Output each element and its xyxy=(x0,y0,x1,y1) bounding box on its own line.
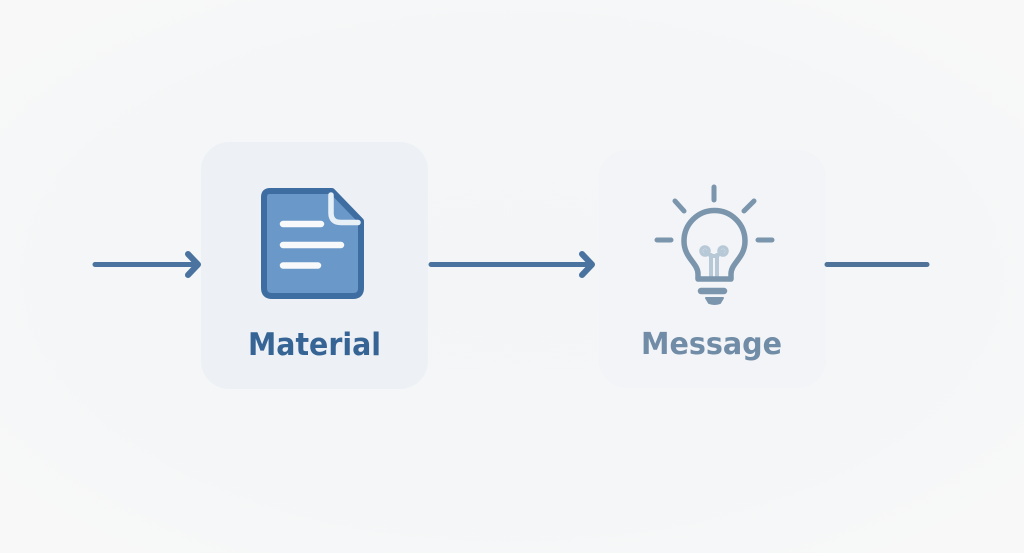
panel: Material xyxy=(201,142,428,389)
icon: bulb outline xyxy=(684,210,745,279)
icon: bulb rays xyxy=(657,187,772,240)
arrow: outgoing line xyxy=(827,262,927,267)
label: Message: Message xyxy=(641,327,782,362)
icon: document xyxy=(264,191,361,296)
arrow: Material to Message xyxy=(431,254,592,275)
panel: Message xyxy=(599,150,826,388)
arrow: incoming to Material xyxy=(95,254,198,275)
icon: bulb filament xyxy=(705,251,723,279)
icon: light bulb xyxy=(657,187,772,304)
label: Material: Material xyxy=(248,327,381,363)
